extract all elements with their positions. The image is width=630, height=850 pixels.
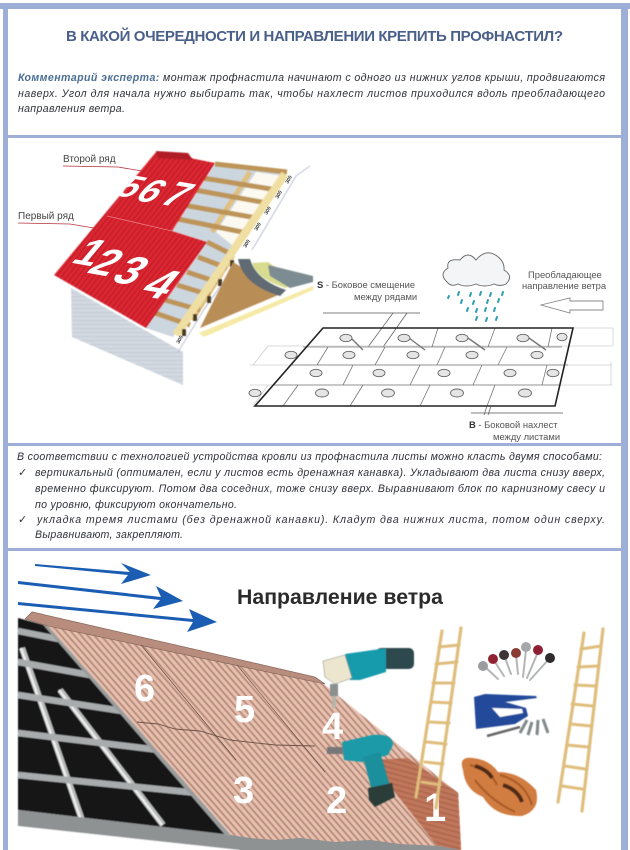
- text block: laying methods: ✓: [18, 514, 27, 526]
- B label: [471, 406, 563, 415]
- roof numbers: 1: [424, 786, 446, 830]
- row labels: Второй ряд: [63, 154, 116, 165]
- cloud with rain: [443, 253, 510, 321]
- spacing marks: 300: [243, 239, 252, 249]
- sheet numbers: 3: [102, 248, 161, 293]
- expert comment: [18, 72, 605, 115]
- sheet numbers: 5: [108, 168, 155, 205]
- sheet numbers: 2: [79, 241, 134, 285]
- sheet layout diagram: между рядами: [354, 291, 417, 302]
- roof section layers: [199, 259, 313, 337]
- text block: laying methods: [17, 451, 605, 541]
- illustration: roof sheet laying order: Первый ряд: [18, 211, 74, 222]
- inner seams: [274, 328, 568, 406]
- title: В КАКОЙ ОЧЕРЕДНОСТИ И НАПРАВЛЕНИИ КРЕПИТЬ ПРОФНАСТИЛ?: [66, 27, 563, 45]
- text block: laying methods: В соответствии с технологией устройства кровли из профнастила листы можно класть двумя способами:: [17, 451, 602, 463]
- red sheets: [54, 152, 215, 328]
- sheet layout diagram: между листами: [493, 431, 560, 442]
- text block: laying methods: временно фиксируют. Потом два соседних, тоже снизу вверх. Выравнивают блок по карнизному свесу и: [35, 483, 605, 495]
- wall: [71, 288, 183, 385]
- ridge and corrugated sheets: [32, 612, 461, 850]
- illustration: roof sheet laying order: [18, 151, 313, 385]
- text block: laying methods: Выравнивают, закрепляют.: [35, 529, 183, 541]
- text block: laying methods: по уровню, фиксируют окончательно.: [35, 499, 237, 511]
- sheet numbers: 6: [126, 173, 177, 210]
- text block: laying methods: вертикальный (оптимален, если у листов есть дренажная канавка). Укладывают два листа снизу вверх,: [35, 467, 605, 479]
- icon: left ladder: [416, 628, 461, 808]
- sheet numbers: 1: [63, 231, 118, 275]
- spacing marks: 300: [285, 175, 294, 185]
- sheet layout diagram: [249, 279, 613, 442]
- wind direction label and arrow: [522, 269, 607, 313]
- wind direction label and arrow: Преобладающее: [528, 269, 602, 280]
- roof numbers: [134, 668, 446, 830]
- sheet numbers: 7: [151, 174, 205, 214]
- heading: wind direction: Направление ветра: [237, 585, 444, 609]
- text block: laying methods: ✓: [18, 467, 27, 479]
- S label: S - Боковое смещение: [317, 279, 415, 290]
- sheet layout diagram: B - Боковой нахлест: [469, 419, 558, 430]
- roof numbers: 4: [322, 706, 343, 748]
- icon: right ladder: [558, 629, 603, 811]
- wind arrows: [18, 563, 217, 632]
- batten frame: [18, 612, 461, 850]
- illustration: roof with wind direction: [18, 612, 461, 850]
- expert comment: направления ветра.: [18, 103, 125, 115]
- wind direction label and arrow: направление ветра: [522, 280, 607, 291]
- screw marks: [351, 338, 546, 350]
- spacing marks: 300: [275, 190, 284, 200]
- icon: roofing screws: [478, 642, 555, 680]
- dimension line: [252, 166, 310, 250]
- spacing marks: 300: [254, 222, 263, 232]
- sheet numbers: 4: [130, 261, 191, 308]
- outer outline: [255, 328, 573, 406]
- text block: laying methods: укладка тремя листами (без дренажной канавки). Кладут два нижних листа, потом один сверху.: [36, 514, 605, 526]
- icon: cordless drill: [327, 735, 395, 807]
- sheet numbers: [63, 168, 205, 308]
- sheet number bubbles: [249, 333, 567, 397]
- icon: coiled rope: [462, 758, 537, 816]
- spacing marks: [176, 175, 294, 345]
- spacing marks: 300: [176, 335, 185, 345]
- roof numbers: 3: [233, 770, 254, 812]
- roof numbers: 6: [134, 668, 155, 710]
- expert comment: наверх. Угол для начала нужно выбирать так, чтобы нахлест листов приходился вдоль преобладающего: [18, 88, 605, 100]
- ghost rows: [250, 328, 613, 406]
- expert comment: Комментарий эксперта: монтаж профнастила начинают с одного из нижних углов крыши, продвигаются: [18, 72, 605, 84]
- icon: nibbler tool: [323, 648, 414, 708]
- icon: stapler: [474, 694, 548, 736]
- roof numbers: 5: [234, 689, 255, 731]
- spacing marks: 300: [264, 206, 273, 216]
- roof numbers: 2: [326, 780, 347, 822]
- roof frame: [146, 164, 310, 352]
